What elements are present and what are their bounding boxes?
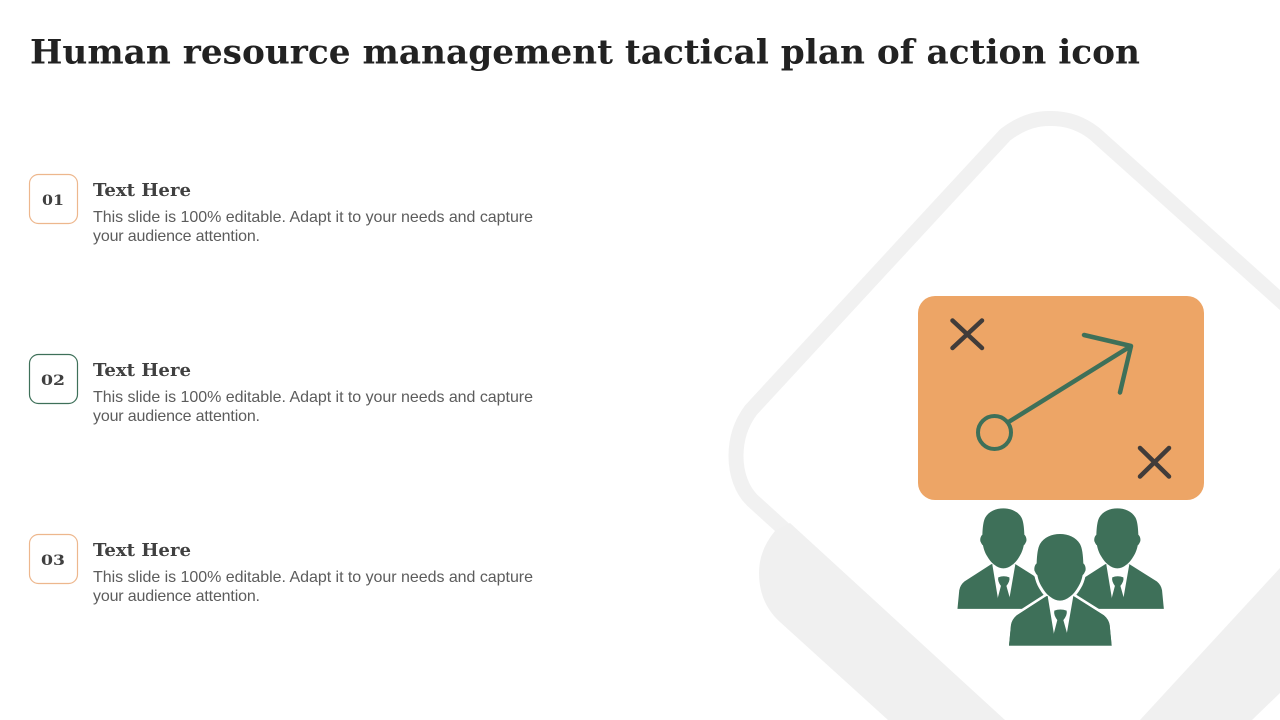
icon: person centre (1009, 534, 1112, 646)
body text 01: This slide is 100% editable. Adapt it to your needs and capture (93, 209, 533, 226)
list item 02 (30, 354, 533, 425)
body text 01: your audience attention. (93, 228, 260, 245)
number badge 03: 03 (41, 553, 65, 569)
background diamond shapes (736, 118, 1280, 720)
number badge 02: 02 (41, 373, 65, 389)
number badge 01: 01 (42, 193, 64, 209)
icon: cross bottom right (1140, 448, 1169, 476)
body text 02 (93, 389, 533, 425)
icon: team of three people (957, 508, 1164, 646)
number badge 02 (30, 354, 78, 404)
arrow (1008, 335, 1131, 422)
number badge 01 (30, 174, 78, 224)
icon: person left (957, 508, 1050, 609)
body text 02: your audience attention. (93, 408, 260, 425)
list item 01 (30, 174, 533, 245)
heading 03: Text Here (93, 540, 191, 561)
body text 01 (93, 209, 533, 245)
body text 03: your audience attention. (93, 588, 260, 605)
icon: tactical plan board (918, 296, 1204, 500)
body text 02: This slide is 100% editable. Adapt it to your needs and capture (93, 389, 533, 406)
body text 03: This slide is 100% editable. Adapt it to your needs and capture (93, 569, 533, 586)
body text 03 (93, 569, 533, 605)
heading 01: Text Here (93, 180, 191, 201)
icon: person right (1071, 508, 1164, 609)
icon: start circle (978, 416, 1011, 449)
number badge 03 (30, 534, 78, 584)
heading 02: Text Here (93, 360, 191, 381)
list item 03 (30, 534, 533, 605)
icon: cross top left (952, 320, 982, 348)
title: Human resource management tactical plan of action icon (30, 32, 1140, 72)
